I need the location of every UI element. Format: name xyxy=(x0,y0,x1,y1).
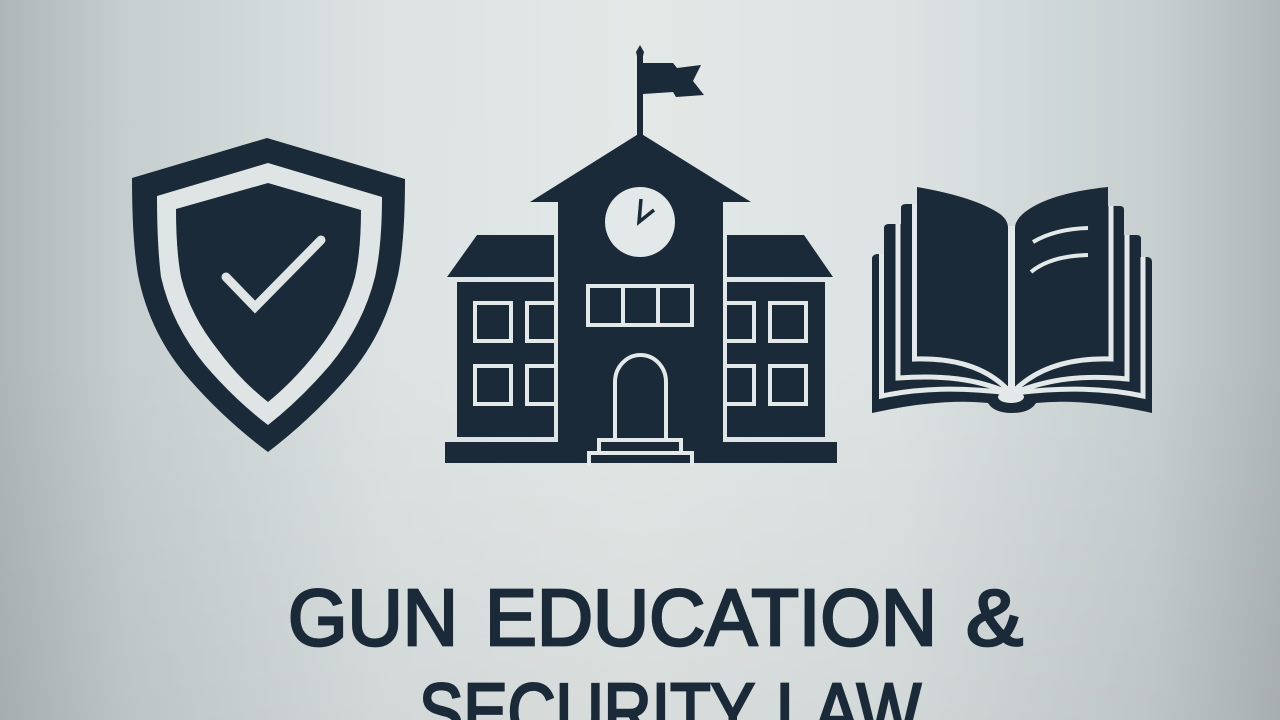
icon: school building xyxy=(445,45,837,466)
title line 1 xyxy=(288,573,1023,662)
shield light band xyxy=(157,163,382,425)
inner page gap lines xyxy=(914,204,1111,391)
right wing windows xyxy=(727,303,806,404)
central triple window xyxy=(588,286,692,325)
icon: open book xyxy=(872,187,1152,413)
clock face xyxy=(605,187,675,257)
right wing roof xyxy=(727,235,833,277)
shield inner panel xyxy=(176,183,361,402)
title line 1: & xyxy=(966,573,1023,662)
title xyxy=(288,573,1023,720)
shield outer ring xyxy=(132,138,405,452)
left wing wall xyxy=(457,282,554,437)
arched door xyxy=(615,355,666,438)
right wing wall xyxy=(727,282,825,437)
left wing windows xyxy=(475,303,554,404)
entrance steps xyxy=(589,440,692,466)
icon: shield with checkmark xyxy=(132,138,405,452)
left wing roof xyxy=(447,235,554,277)
clock hands xyxy=(639,199,654,222)
flag pole xyxy=(636,45,644,135)
spine gap xyxy=(1008,226,1015,394)
book silhouette with stacked pages xyxy=(872,187,1152,413)
title line 1: GUN xyxy=(288,573,458,662)
central tower with gable roof xyxy=(530,133,751,463)
base plinth xyxy=(445,442,837,463)
middle page gap lines xyxy=(898,224,1127,393)
flag xyxy=(643,63,704,97)
title line 1: EDUCATION xyxy=(485,573,937,662)
checkmark xyxy=(226,240,321,307)
page text lines xyxy=(1031,228,1088,272)
spine highlight xyxy=(998,391,1024,403)
outer page gap lines xyxy=(882,254,1143,396)
